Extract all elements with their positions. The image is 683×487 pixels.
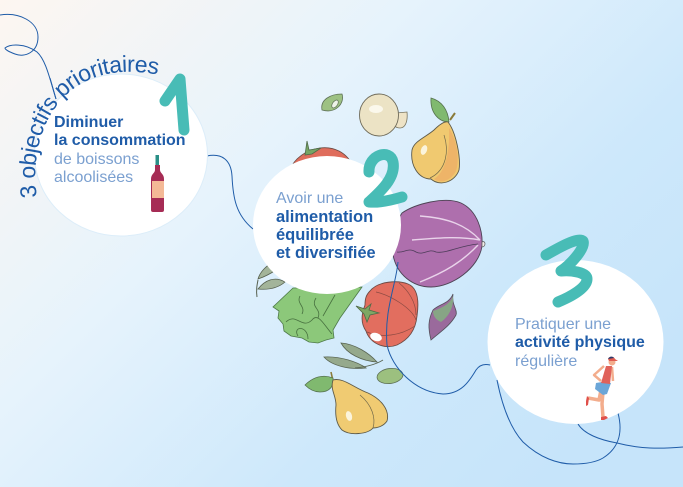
heading: alimentation: alimentation bbox=[276, 208, 373, 226]
illustration: olive bottom bbox=[376, 367, 404, 385]
connecting line: slash over title bbox=[50, 78, 56, 99]
icon: wine bottle bbox=[151, 155, 164, 212]
icon: runner bbox=[586, 357, 618, 420]
title arc text: 3 objectifs prioritaires bbox=[19, 55, 158, 198]
number 2 bbox=[369, 155, 402, 202]
heading: et diversifiée: et diversifiée bbox=[276, 244, 376, 262]
illustration: pear top right bbox=[412, 98, 459, 183]
circle 1 bbox=[34, 74, 208, 236]
circle 3 bbox=[488, 260, 664, 424]
illustration: small leaves left bbox=[257, 263, 285, 297]
illustration: tomato centre bbox=[356, 282, 418, 347]
illustration: red cabbage bbox=[393, 200, 485, 287]
heading: activité physique: activité physique bbox=[515, 334, 645, 351]
illustration: basil leaf bbox=[429, 294, 456, 340]
illustration: lettuce bbox=[273, 287, 362, 343]
illustration: olive branch bbox=[324, 343, 383, 369]
illustration: olive top bbox=[322, 94, 343, 111]
number 3 bbox=[546, 240, 587, 302]
illustration: tomato behind circle 2 bbox=[290, 141, 354, 170]
heading: diminuer: Diminuer bbox=[54, 114, 123, 131]
text: avoir une: Avoir une bbox=[276, 190, 343, 207]
number 1 bbox=[165, 79, 184, 130]
connecting line: under circle 3 right bbox=[578, 424, 683, 448]
text: alcoolisées: alcoolisées bbox=[54, 169, 133, 186]
connecting line: circle 1 to circle 2 bbox=[207, 155, 253, 229]
connecting line: loop under circle 3 bbox=[497, 380, 620, 464]
text: régulière: régulière bbox=[515, 353, 577, 370]
heading: la consommation: la consommation bbox=[54, 132, 186, 149]
text: de boissons: de boissons bbox=[54, 151, 139, 168]
heading: équilibrée: équilibrée bbox=[276, 226, 354, 244]
text: pratiquer une: Pratiquer une bbox=[515, 316, 611, 333]
circle 2 bbox=[253, 156, 401, 294]
illustration: pear bottom bbox=[305, 372, 388, 434]
illustration: mushroom bbox=[360, 94, 407, 136]
connecting line: top left loop bbox=[0, 14, 56, 99]
connecting line: circle 2 to circle 3 bbox=[387, 262, 490, 394]
